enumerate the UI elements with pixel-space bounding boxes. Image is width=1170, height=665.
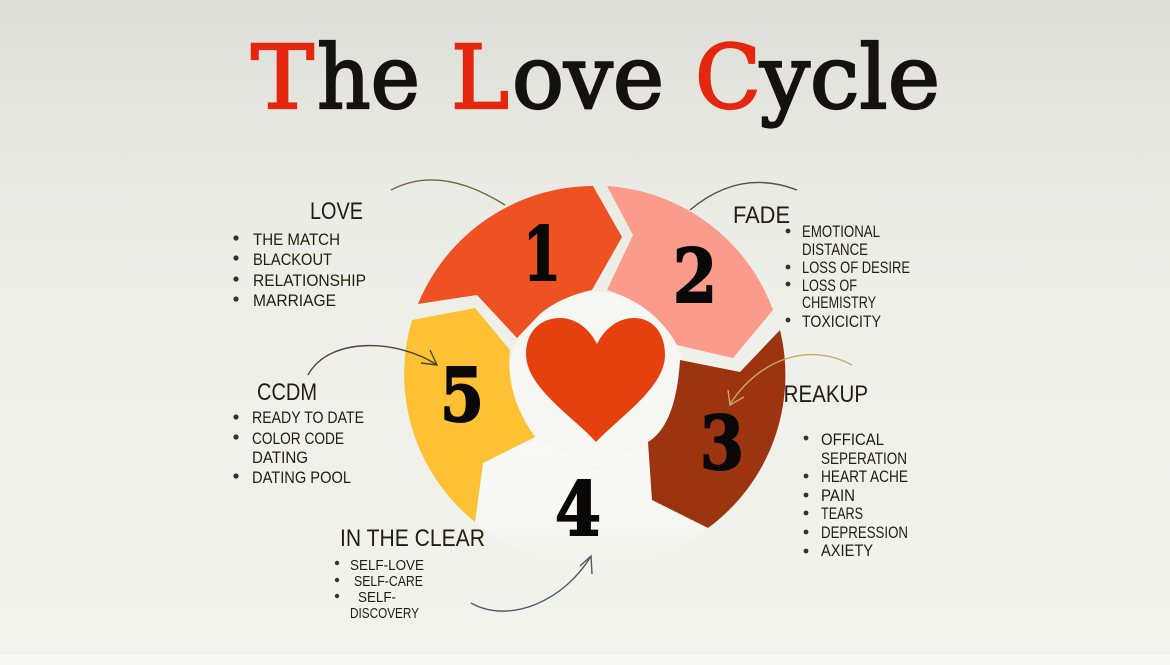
title: C bbox=[695, 26, 761, 129]
title: ove bbox=[512, 26, 664, 129]
number 3: 3 bbox=[700, 401, 744, 487]
heading: fade: FADE bbox=[733, 202, 790, 229]
list: fade: DISTANCE bbox=[802, 240, 868, 259]
list: in the clear: SELF-LOVE bbox=[350, 557, 424, 574]
list: ccdm: DATING POOL bbox=[252, 468, 351, 487]
list: breakup: AXIETY bbox=[821, 541, 873, 560]
title: ycle bbox=[759, 26, 940, 129]
list: in the clear bbox=[335, 557, 424, 622]
list: breakup: TEARS bbox=[821, 504, 863, 523]
segment 4: in the clear bbox=[475, 437, 708, 565]
list: ccdm: COLOR CODE bbox=[252, 429, 344, 448]
list: breakup: OFFICAL bbox=[821, 430, 884, 449]
list: ccdm: READY TO DATE bbox=[252, 408, 364, 427]
list: fade bbox=[786, 222, 910, 331]
arrow: ccdm bbox=[308, 346, 437, 375]
list: love bbox=[233, 230, 366, 310]
panel: ccdm bbox=[233, 379, 364, 487]
arrow: in the clear bbox=[471, 556, 592, 611]
panel: love bbox=[233, 198, 366, 310]
heading: in the clear: IN THE CLEAR bbox=[340, 525, 485, 552]
title: L bbox=[451, 26, 509, 129]
heart bbox=[526, 318, 665, 442]
list: love: BLACKOUT bbox=[253, 250, 332, 269]
list: love: THE MATCH bbox=[253, 230, 340, 249]
panel: in the clear bbox=[335, 525, 485, 622]
list: fade: TOXICICITY bbox=[802, 312, 881, 331]
list: breakup: HEART ACHE bbox=[821, 467, 908, 486]
heading: ccdm: CCDM bbox=[257, 379, 317, 406]
segment 1: love bbox=[418, 186, 622, 338]
list: in the clear: DISCOVERY bbox=[350, 605, 419, 622]
list: fade: EMOTIONAL bbox=[802, 222, 880, 241]
list: in the clear: SELF- bbox=[358, 589, 396, 606]
number 2: 2 bbox=[673, 234, 717, 320]
list: love: RELATIONSHIP bbox=[253, 271, 366, 290]
title bbox=[251, 26, 940, 129]
title: he bbox=[317, 26, 420, 129]
segment 5: ccdm bbox=[404, 308, 535, 522]
panel: fade bbox=[733, 202, 910, 331]
number 1: 1 bbox=[523, 212, 561, 298]
list: love: MARRIAGE bbox=[253, 291, 336, 310]
list: fade: CHEMISTRY bbox=[802, 293, 876, 312]
list: breakup: DEPRESSION bbox=[821, 523, 908, 542]
list: breakup bbox=[804, 430, 908, 560]
list: fade: LOSS OF DESIRE bbox=[802, 258, 910, 277]
list: ccdm: DATING bbox=[252, 448, 308, 467]
list: in the clear: SELF-CARE bbox=[354, 573, 423, 590]
arrow: breakup bbox=[728, 355, 852, 405]
heading: breakup: BREAKUP bbox=[770, 381, 868, 408]
list: ccdm bbox=[233, 408, 364, 487]
halo around heart bbox=[508, 292, 684, 468]
segment 2: fade bbox=[607, 186, 773, 358]
list: breakup: PAIN bbox=[821, 486, 855, 505]
segment 3: breakup bbox=[648, 330, 785, 528]
number 5: 5 bbox=[440, 353, 484, 439]
title: T bbox=[251, 26, 314, 129]
heading: love: LOVE bbox=[310, 198, 363, 225]
list: fade: LOSS OF bbox=[802, 276, 857, 295]
number 4: 4 bbox=[555, 467, 601, 553]
list: breakup: SEPERATION bbox=[821, 449, 907, 468]
curve: fade bbox=[690, 182, 797, 210]
curve: love bbox=[391, 180, 505, 205]
